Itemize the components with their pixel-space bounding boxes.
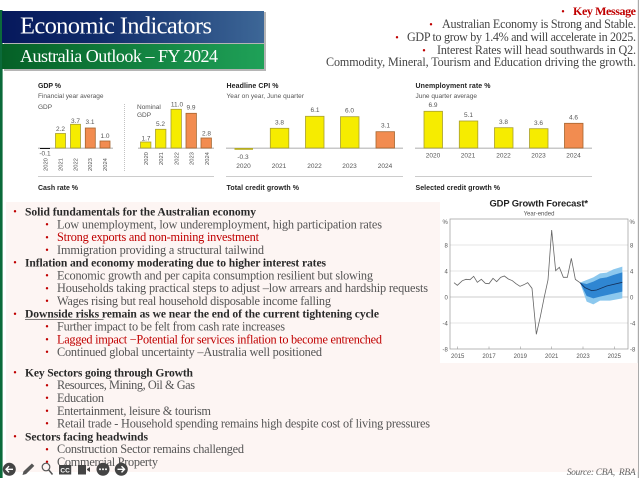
chart: Unemployment rate %: 6.9 [428, 102, 438, 109]
text block: sector bullets: Construction Sector remains challenged [57, 442, 244, 456]
text block: sector bullets: Commercial Property [57, 455, 159, 469]
icon: back arrow [3, 463, 16, 476]
chart: GDP Growth Forecast: 2015 [451, 354, 465, 360]
text block: sector bullets: • [13, 368, 17, 379]
icon: camera [78, 465, 90, 474]
subtitle: Australia Outlook – FY 2024 [20, 46, 218, 66]
icon: magnifier [42, 463, 52, 474]
text block: sector bullets: • [45, 445, 49, 456]
chart: Unemployment rate %: 5.1 [464, 112, 473, 119]
chart: GDP % [38, 83, 214, 192]
chart: GDP Growth Forecast: % [630, 220, 636, 226]
chart: GDP Growth Forecast: -4 [630, 322, 636, 328]
text block: economy outlook bullets: Downside risks remain as we near the end of the current tightening cycle [25, 308, 379, 321]
chart: GDP %: 5.2 [156, 121, 165, 128]
text block: sector bullets: Resources, Mining, Oil & Gas [57, 378, 195, 392]
text block: economy outlook bullets: Further impact to be felt from cash rate increases [57, 320, 285, 334]
text block: economy outlook bullets: Households taking practical steps to adjust –low arrears and hardship requests [57, 281, 428, 295]
chart: Headline CPI %: 3.1 [381, 122, 390, 130]
key message block: GDP to grow by 1.4% and will accelerate in 2025. [407, 30, 636, 44]
chart: Headline CPI %: 2023 [342, 163, 357, 170]
key message block: • [395, 33, 399, 44]
chart: GDP %: 11.0 [171, 102, 183, 108]
icon: pencil [22, 464, 34, 475]
chart: Unemployment rate %: 2024 [566, 152, 581, 160]
chart: Unemployment rate %: 3.6 [534, 120, 543, 127]
text block: economy outlook bullets: • [13, 207, 17, 218]
text block: economy outlook bullets: • [45, 322, 49, 333]
title: Economic Indicators [20, 12, 212, 40]
chart: Headline CPI %: Year on year, June quarter [226, 93, 305, 100]
chart: GDP Growth Forecast: 2017 [482, 354, 496, 360]
chart: Unemployment rate %: Selected credit growth % [416, 185, 501, 192]
text block: economy outlook bullets: Strong exports and non-mining investment [57, 230, 260, 244]
text block: economy outlook bullets: • [45, 348, 49, 358]
text block: economy outlook bullets: Immigration providing a structural tailwind [57, 243, 264, 257]
chart: GDP Growth Forecast: -8 [442, 348, 448, 354]
chart: GDP Growth Forecast: 2019 [514, 354, 528, 360]
icon: more [96, 463, 110, 476]
key message block: Commodity, Mineral, Tourism and Education driving the growth. [326, 55, 636, 69]
text block: economy outlook bullets: Economic growth and per capita consumption resilient but slowing [57, 268, 373, 282]
key message block: Key Message [573, 4, 637, 18]
chart: Headline CPI %: 2022 [307, 163, 322, 170]
source note: Source: CBA, RBA [567, 468, 636, 478]
text block: economy outlook bullets: • [45, 296, 49, 308]
chart: GDP Growth Forecast: Year-ended [524, 212, 554, 218]
text block: economy outlook bullets: Wages rising but real household disposable income falling [57, 294, 331, 308]
chart: GDP Growth Forecast: -8 [630, 348, 636, 354]
chart: GDP %: 9.9 [186, 104, 196, 112]
icon: forward arrow [115, 463, 128, 476]
text block: sector bullets: • [45, 419, 49, 430]
right grey edge line [638, 0, 639, 478]
text block: sector bullets: • [13, 432, 17, 443]
text block: economy outlook bullets: • [45, 271, 49, 282]
chart: GDP %: 2020 [144, 152, 150, 165]
chart: GDP %: Nominal [137, 104, 161, 111]
chart: Headline CPI %: -0.3 [237, 154, 249, 161]
text block: economy outlook bullets: • [45, 233, 49, 244]
chart: Headline CPI %: 2020 [236, 163, 251, 170]
chart: GDP Growth Forecast: 2021 [545, 354, 559, 360]
text block: sector bullets: • [45, 406, 49, 418]
text block: economy outlook bullets: • [13, 258, 17, 269]
chart: GDP %: GDP [38, 104, 52, 111]
chart: Unemployment rate %: 2021 [461, 152, 476, 160]
chart: Headline CPI %: 2021 [272, 163, 287, 170]
panel: upper pink background [6, 202, 440, 363]
key message block: Interest Rates will head southwards in Q2. [437, 43, 636, 57]
chart: GDP Growth Forecast: GDP Growth Forecast* [490, 198, 588, 209]
text block: sector bullets: • [45, 381, 49, 392]
text block: sector bullets: Entertainment, leisure & tourism [57, 404, 211, 418]
key message block: • [561, 7, 565, 18]
text block: economy outlook bullets: • [13, 310, 17, 320]
chart: GDP %: 3.1 [85, 119, 95, 126]
chart: Unemployment rate %: 2022 [496, 152, 511, 160]
chart: Unemployment rate %: June quarter average [416, 93, 477, 100]
chart: GDP Growth Forecast: 2025 [608, 354, 622, 360]
chart: GDP %: 2024 [205, 151, 211, 165]
text block: sector bullets: Key Sectors going through Growth [25, 366, 194, 380]
chart: Headline CPI %: Total credit growth % [226, 185, 300, 192]
chart: Unemployment rate %: 4.6 [569, 114, 578, 122]
chart: GDP %: 1.7 [141, 136, 151, 142]
text block: economy outlook bullets: • [45, 220, 49, 231]
text block: economy outlook bullets: • [45, 284, 49, 295]
chart: Headline CPI %: Headline CPI % [226, 83, 279, 90]
chart: Headline CPI %: 2024 [378, 163, 393, 170]
chart: GDP %: -0.1 [39, 150, 51, 158]
chart: GDP %: 2021 [159, 152, 165, 165]
chart: Unemployment rate % [415, 83, 592, 192]
chart: GDP Growth Forecast: 8 [630, 244, 634, 250]
chart: GDP %: Financial year average [38, 93, 104, 100]
chart: Unemployment rate %: Unemployment rate % [416, 83, 491, 90]
text block: sector bullets: • [45, 394, 49, 404]
chart: GDP %: GDP % [38, 83, 62, 90]
chart: GDP Growth Forecast: -4 [442, 322, 448, 328]
key message block [326, 4, 637, 69]
text block: sector bullets: Sectors facing headwinds [25, 430, 148, 443]
text block: sector bullets: Education [57, 391, 104, 405]
chart: GDP %: GDP [137, 112, 151, 119]
text block: economy outlook bullets: Solid fundamentals for the Australian economy [25, 206, 256, 218]
chart: GDP Growth Forecast: 4 [444, 270, 448, 276]
chart: Unemployment rate %: 2023 [531, 152, 546, 160]
text block: economy outlook bullets: Low unemployment, low underemployment, high participation rates [57, 217, 382, 231]
text block: economy outlook bullets: Lagged impact −Potential for services inflation to become entrenched [57, 332, 382, 346]
chart: GDP %: 2021 [58, 158, 64, 171]
chart: GDP Growth Forecast: % [442, 220, 448, 226]
text block: sector bullets [13, 366, 430, 469]
chart: Unemployment rate %: 2020 [426, 152, 441, 160]
text block: economy outlook bullets [13, 206, 428, 359]
panel: lower pink background [6, 363, 638, 472]
chart: GDP %: 2020 [44, 158, 50, 171]
chart: GDP Growth Forecast: 4 [630, 270, 634, 276]
key message block: Australian Economy is Strong and Stable. [442, 17, 636, 31]
key message block: • [429, 20, 433, 31]
chart: Headline CPI % [226, 83, 403, 192]
text block: economy outlook bullets: • [45, 335, 49, 346]
chart: Headline CPI %: 3.8 [275, 120, 284, 126]
chart: GDP %: 2022 [74, 158, 80, 171]
key message block: • [422, 46, 426, 57]
chart: GDP %: 2.2 [56, 126, 65, 133]
chart: GDP Growth Forecast: 0 [444, 296, 448, 302]
text block: sector bullets: • [45, 458, 49, 468]
chart: GDP Growth Forecast [442, 198, 636, 360]
chart: GDP Growth Forecast: 0 [630, 296, 634, 302]
chart: Unemployment rate %: 3.8 [499, 119, 508, 126]
chart: Headline CPI %: 6.0 [345, 108, 354, 114]
text block: economy outlook bullets: • [45, 246, 49, 256]
text block: economy outlook bullets: Inflation and economy moderating due to higher interest rates [25, 257, 326, 270]
chart: GDP %: Cash rate % [38, 185, 79, 192]
text block: sector bullets: Retail trade - Household spending remains high despite cost of living pressures [57, 416, 430, 430]
left green edge strip [0, 10, 3, 478]
chart: GDP %: 2023 [190, 152, 196, 165]
icon: viewer toolbar [3, 463, 128, 476]
title banner [2, 11, 266, 71]
chart: GDP Growth Forecast: 8 [444, 244, 448, 250]
chart: GDP %: 1.0 [100, 133, 110, 140]
chart: GDP %: 2.8 [202, 130, 211, 138]
icon: captions: CC [60, 467, 70, 474]
chart: GDP %: 2023 [88, 158, 94, 171]
chart: GDP %: 2022 [174, 152, 180, 165]
chart: GDP %: 2024 [103, 157, 109, 171]
text block: economy outlook bullets: Continued global uncertainty –Australia well positioned [57, 345, 322, 359]
chart: Headline CPI %: 6.1 [310, 107, 320, 114]
chart: GDP Growth Forecast: 2023 [576, 354, 590, 360]
chart: GDP %: 3.7 [71, 118, 80, 125]
